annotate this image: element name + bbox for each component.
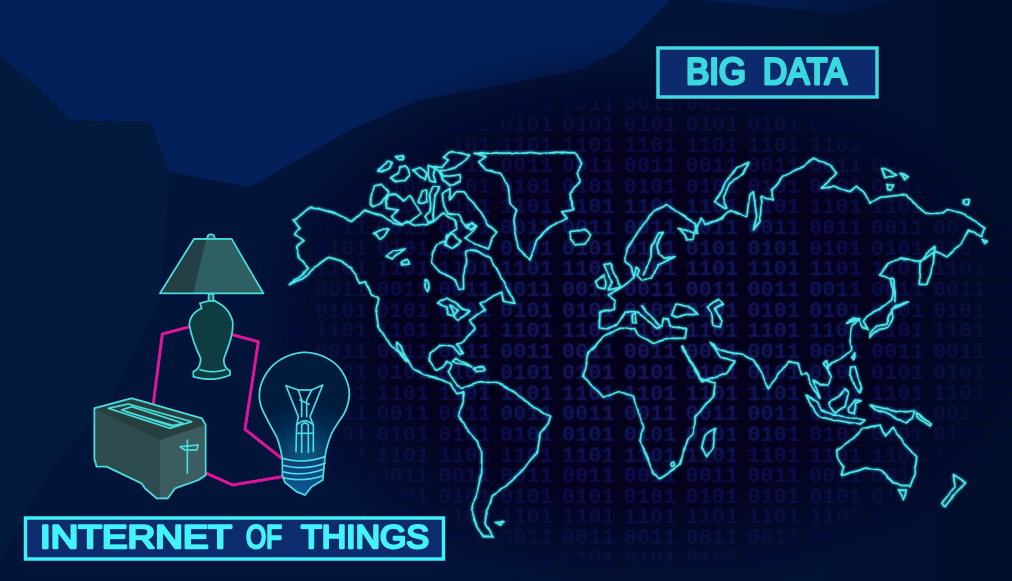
Internet of Things label: INTERNET (40, 519, 232, 555)
binary digits background (191, 92, 1012, 572)
New Zealand (942, 474, 966, 507)
Arctic island outlines (370, 152, 497, 292)
internet of things illustration (94, 234, 349, 498)
Caspian Sea (707, 299, 723, 327)
Siberian islands (882, 168, 987, 244)
Black Sea (672, 304, 698, 317)
Internet of Things label (26, 518, 444, 559)
Internet of Things label: THINGS (301, 519, 429, 555)
Baja California (397, 342, 407, 362)
connection wires (153, 327, 283, 485)
Big Data label: DATA (763, 51, 847, 92)
Novaya Zemlya (715, 162, 749, 208)
icon: lamp (160, 234, 263, 379)
Tasmania (898, 490, 907, 499)
map: Europe, Asia, Africa, Oceania (583, 158, 987, 507)
Australia (837, 425, 917, 487)
Indonesian islands (806, 388, 865, 424)
Madagascar (702, 428, 715, 457)
map: Canadian Arctic islands (370, 152, 497, 292)
North and South America outline (289, 207, 551, 537)
Sakhalin (919, 247, 935, 285)
Falkland Islands (495, 522, 504, 525)
world map (289, 152, 987, 537)
icon: light bulb (259, 352, 349, 495)
Big Data label: BIG (686, 51, 746, 92)
Lesotho (671, 462, 675, 466)
Iceland (570, 229, 591, 245)
British Isles (596, 263, 621, 290)
icon: toaster (94, 398, 206, 498)
Japan (869, 278, 908, 337)
Caribbean islands (452, 358, 485, 372)
Taiwan, Hainan, Philippines (823, 353, 862, 393)
Eurasia and Africa outline (583, 158, 985, 478)
New Guinea (870, 404, 932, 426)
Sardinia (632, 313, 636, 323)
Italy (642, 306, 660, 327)
Baltic Sea (633, 232, 675, 280)
map: the Americas (289, 153, 591, 537)
Great Lakes (437, 298, 470, 320)
Big Data label (658, 48, 877, 97)
Greenland (474, 153, 582, 260)
Internet of Things label: OF (246, 519, 282, 555)
